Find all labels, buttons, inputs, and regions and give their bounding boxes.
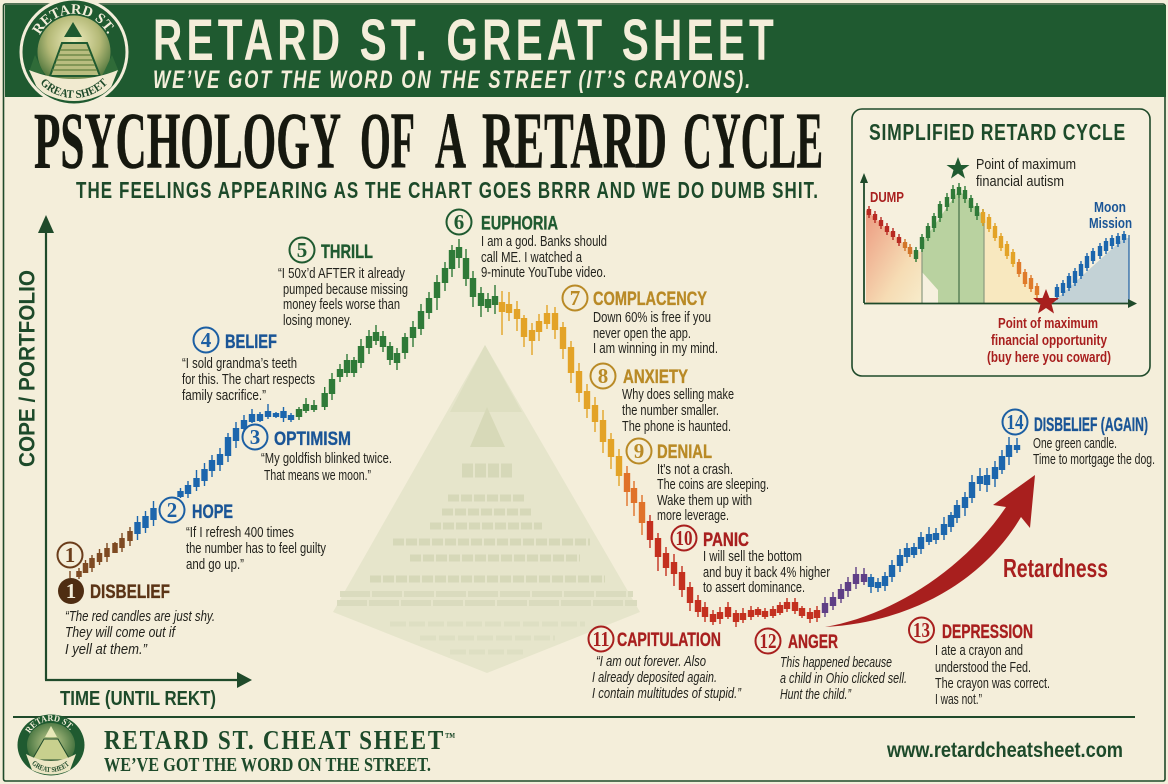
footer website: www.retardcheatsheet.com	[886, 739, 1123, 762]
label: moon mission	[1089, 200, 1132, 232]
quote: the number has to feel guilty	[186, 541, 327, 557]
quote	[703, 549, 830, 596]
quote: 9-minute YouTube video.	[481, 265, 606, 281]
main title: OF	[360, 98, 415, 186]
quote: “The red candles are just shy.	[65, 609, 215, 625]
marker 9	[626, 438, 652, 464]
footer	[13, 714, 1135, 776]
quote: I was not.”	[935, 692, 982, 708]
heading: DISBELIEF	[90, 581, 170, 603]
quote	[592, 654, 742, 702]
stage 9: denial	[626, 438, 769, 524]
main title: RETARD	[482, 98, 667, 186]
stage 8: anxiety	[590, 364, 734, 435]
arrow: retardness	[825, 475, 1035, 627]
header subtitle: WE’VE GOT THE WORD ON THE STREET (IT’S CRAYONS).	[153, 66, 752, 94]
candles: disbelief brown	[70, 527, 130, 579]
marker 2: 2	[167, 498, 177, 522]
label: maximum autism	[976, 157, 1076, 190]
icon: red star	[1033, 289, 1059, 314]
heading: OPTIMISM	[274, 428, 351, 450]
stage 11: capitulation	[588, 626, 742, 702]
quote: the number smaller.	[622, 403, 719, 419]
label: maximum opportunity: financial opportunity	[991, 332, 1108, 349]
marker 8	[590, 364, 616, 388]
marker 7	[562, 286, 588, 310]
mini chart	[860, 173, 1137, 308]
text: CYCLE	[683, 98, 823, 186]
x axis	[45, 672, 252, 710]
quote: losing money.	[283, 313, 352, 329]
quote: I am winning in my mind.	[593, 341, 718, 357]
header banner	[5, 5, 1166, 97]
label: maximum opportunity: (buy here you coward)	[987, 349, 1111, 366]
quote	[65, 609, 215, 658]
quote: to assert dominance.	[703, 580, 805, 596]
heading: EUPHORIA	[481, 212, 558, 234]
label: maximum autism: Point of maximum	[976, 157, 1076, 173]
quote: One green candle.	[1033, 436, 1117, 452]
marker 1 filled: 1	[66, 579, 76, 603]
marker 9: 9	[634, 439, 644, 463]
x axis label: TIME (UNTIL REKT)	[60, 688, 216, 710]
marker 8: 8	[598, 364, 608, 388]
candles: panic red	[650, 515, 817, 627]
heading: THRILL	[321, 241, 373, 263]
marker 1 outline: 1	[65, 543, 75, 567]
header title: RETARD ST. GREAT SHEET	[153, 8, 778, 73]
candles: anger purple	[825, 567, 864, 617]
heading: BELIEF	[225, 331, 277, 353]
marker 1 filled	[58, 578, 84, 604]
marker 12: 12	[760, 629, 776, 653]
stage 2: hope	[160, 498, 327, 573]
icon: footer seal: GREAT SHEET	[32, 761, 69, 772]
stage 4: belief	[182, 328, 315, 404]
watermark pyramid	[333, 345, 640, 673]
marker 5: 5	[297, 238, 307, 262]
quote: understood the Fed.	[935, 660, 1031, 676]
label: moon mission: Mission	[1089, 216, 1132, 232]
heading: DENIAL	[657, 441, 712, 463]
label: maximum opportunity	[987, 315, 1111, 366]
marker 3: 3	[250, 425, 260, 449]
stage 13: depression	[909, 618, 1050, 708]
quote: The phone is haunted.	[622, 419, 731, 435]
quote: Why does selling make	[622, 387, 734, 403]
marker 6	[446, 210, 472, 234]
quote: never open the app.	[593, 326, 691, 342]
icon: great sheet seal: GREAT SHEET	[42, 78, 107, 98]
quote	[186, 525, 327, 573]
quote: a child in Ohio clicked sell.	[780, 671, 907, 687]
heading: DEPRESSION	[942, 621, 1033, 643]
quote: This happened because	[780, 655, 892, 671]
candles: thrill green	[299, 239, 495, 420]
stage 12: anger	[756, 628, 907, 703]
quote: Down 60% is free if you	[593, 310, 711, 326]
label: dump: DUMP	[870, 190, 904, 206]
quote: pumped because missing	[283, 282, 408, 298]
label: moon mission: Moon	[1094, 200, 1126, 216]
label: retardness: Retardness	[1003, 553, 1108, 583]
quote	[278, 266, 408, 329]
quote	[622, 387, 734, 435]
marker 7: 7	[570, 286, 580, 310]
quote: The crayon was correct.	[935, 676, 1050, 692]
stage 3: optimism	[242, 424, 392, 484]
quote: It's not a crash.	[657, 462, 733, 478]
icon: footer seal: RETARD ST.	[24, 715, 74, 734]
quote: They will come out if	[65, 625, 177, 641]
quote: Hunt the child.”	[780, 687, 852, 703]
quote: I will sell the bottom	[703, 549, 802, 565]
candlestick chart	[70, 239, 1017, 627]
quote	[657, 462, 769, 524]
stage 10: panic	[672, 526, 830, 596]
marker 1 outline	[58, 542, 82, 568]
label: maximum opportunity: Point of maximum	[998, 315, 1098, 332]
footer tagline: WE’VE GOT THE WORD ON THE STREET.	[104, 754, 431, 776]
candles: hope and optimism blue	[138, 404, 291, 540]
quote	[481, 234, 607, 281]
panel: simplified retard cycle	[852, 109, 1150, 376]
y axis label: COPE / PORTFOLIO	[14, 270, 40, 467]
marker 4: 4	[201, 328, 212, 352]
icon: great sheet seal: RETARD ST.	[32, 4, 114, 35]
quote: “I am out forever. Also	[596, 654, 706, 670]
footer title: ™	[445, 730, 457, 744]
quote	[1033, 436, 1155, 468]
main title: A	[435, 98, 466, 186]
main title: PSYCHOLOGY	[34, 98, 341, 186]
marker 6: 6	[454, 210, 464, 234]
footer title: RETARD ST. CHEAT SHEET	[104, 725, 502, 755]
quote: money feels worse than	[283, 297, 400, 313]
quote: “I 50x’d AFTER it already	[278, 266, 406, 282]
y axis	[14, 215, 54, 680]
stage 1: disbelief	[58, 542, 215, 658]
marker 2	[160, 498, 184, 522]
marker 11: 11	[592, 627, 610, 651]
icon: footer seal	[18, 714, 84, 776]
quote: I already deposited again.	[592, 670, 717, 686]
quote: I contain multitudes of stupid.”	[592, 686, 742, 702]
heading: HOPE	[192, 501, 233, 523]
quote	[780, 655, 907, 703]
marker 14: 14	[1006, 410, 1024, 434]
subtitle: THE FEELINGS APPEARING AS THE CHART GOES BRRR AND WE DO DUMB SHIT.	[76, 177, 819, 203]
icon: green star	[946, 157, 970, 178]
quote: call ME. I watched a	[481, 250, 583, 266]
quote: and buy it back 4% higher	[703, 565, 830, 581]
quote: for this. The chart respects	[182, 372, 315, 388]
heading: ANXIETY	[623, 366, 688, 388]
quote: I yell at them.”	[65, 642, 148, 658]
stage 7: complacency	[562, 286, 718, 357]
stage 14: disbelief again	[1002, 410, 1155, 468]
quote	[593, 310, 718, 357]
icon: great sheet seal	[20, 0, 128, 104]
quote: The coins are sleeping.	[657, 477, 769, 493]
marker 10: 10	[676, 526, 692, 550]
quote: I am a god. Banks should	[481, 234, 607, 250]
quote: family sacrifice.”	[182, 388, 266, 404]
quote: more leverage.	[657, 508, 729, 524]
stage 6: euphoria	[446, 210, 607, 281]
quote	[182, 356, 315, 404]
candles: denial deep orange	[627, 466, 642, 535]
label: maximum autism: financial autism	[976, 174, 1064, 190]
quote	[935, 643, 1050, 708]
heading: ANGER	[788, 631, 838, 653]
quote: “If I refresh 400 times	[186, 525, 294, 541]
heading: CAPITULATION	[617, 629, 721, 651]
candles: complacency orange	[502, 291, 619, 486]
marker 3	[242, 424, 268, 450]
quote: “I sold grandma’s teeth	[182, 356, 297, 372]
quote	[261, 451, 392, 484]
candles: disbelief again blue	[871, 437, 1017, 593]
stage 5: thrill	[278, 238, 408, 329]
quote: “My goldfish blinked twice.	[261, 451, 392, 467]
quote: Wake them up with	[657, 493, 752, 509]
heading: PANIC	[703, 529, 749, 551]
quote: That means we moon.”	[264, 468, 371, 484]
quote: and go up.”	[186, 557, 244, 573]
heading: COMPLACENCY	[593, 288, 707, 310]
quote: I ate a crayon and	[935, 643, 1023, 659]
marker 13: 13	[913, 618, 930, 642]
